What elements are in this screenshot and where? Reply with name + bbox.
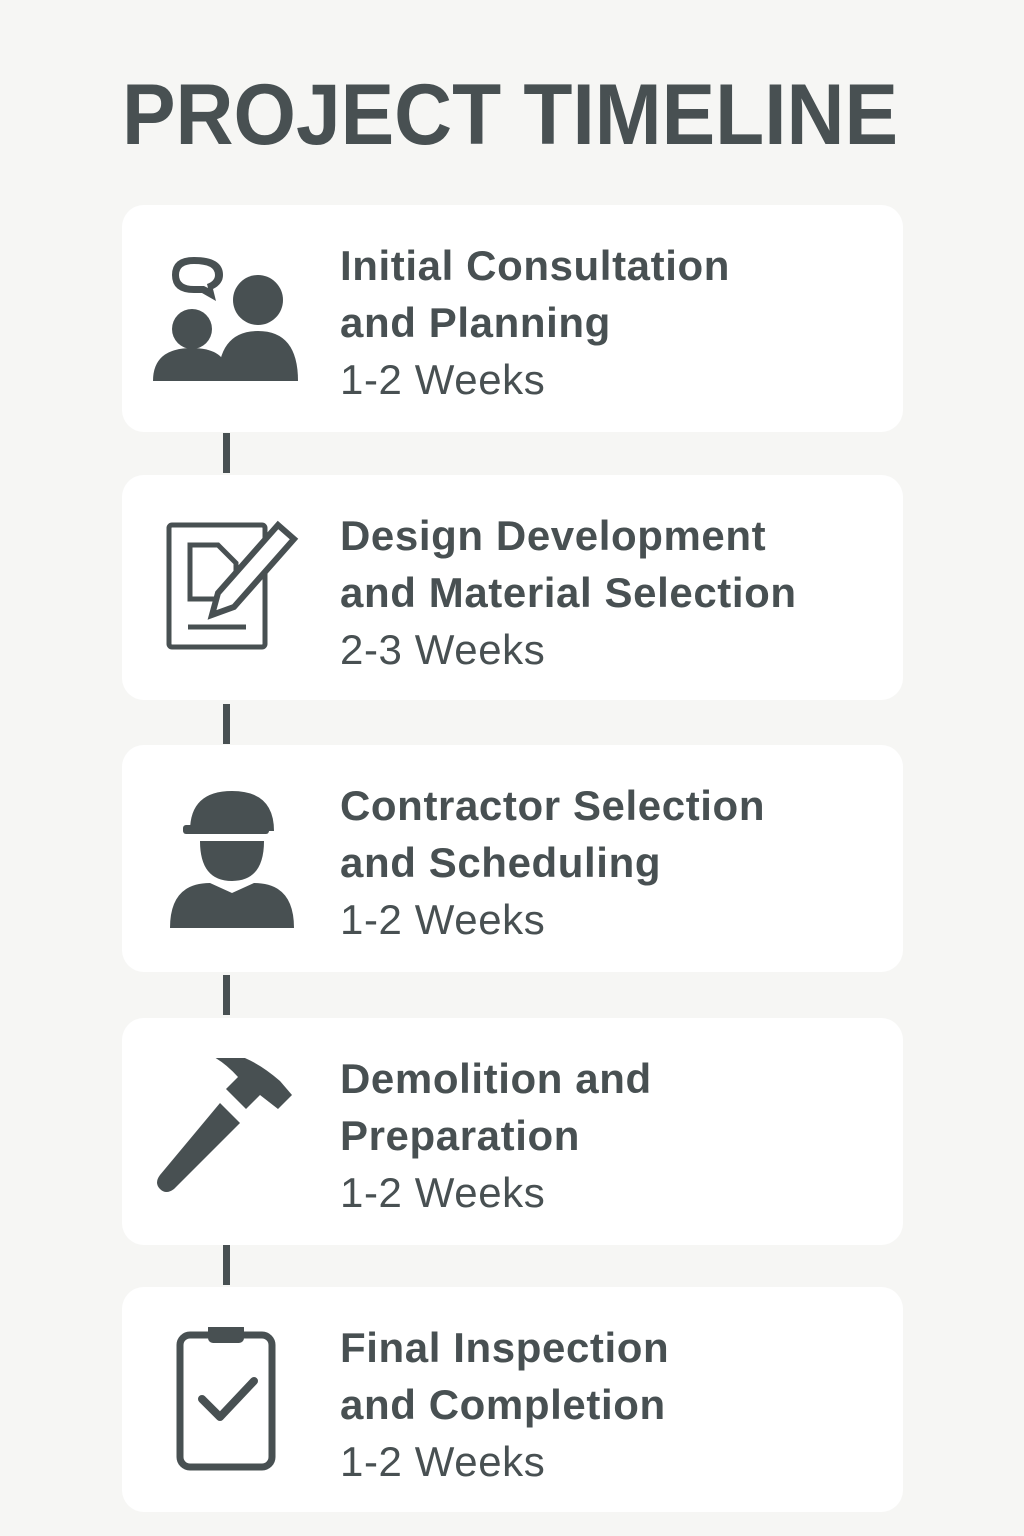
connector [223, 975, 230, 1015]
icon: clipboard check [176, 1327, 276, 1470]
card: demolition: 1-2 Weeks [340, 1169, 545, 1216]
connector [223, 704, 230, 744]
connector [223, 433, 230, 473]
card: demolition: Demolition and [340, 1055, 652, 1102]
card: contractor: Contractor Selection [340, 782, 765, 829]
card: consultation: 1-2 Weeks [340, 356, 545, 403]
icon: hammer [157, 1058, 292, 1192]
card: final: Final Inspection [340, 1324, 669, 1371]
title: PROJECT TIMELINE [122, 67, 898, 163]
card: final: 1-2 Weeks [340, 1438, 545, 1485]
icon: document with pencil [166, 520, 298, 650]
card: contractor: 1-2 Weeks [340, 896, 545, 943]
card: contractor: and Scheduling [340, 839, 661, 886]
icon: people [153, 257, 298, 381]
icon: worker [170, 791, 294, 928]
card: design: Design Development [340, 512, 766, 559]
connector [223, 1245, 230, 1285]
card: final: and Completion [340, 1381, 666, 1428]
card: demolition: Preparation [340, 1112, 580, 1159]
card: consultation [122, 205, 903, 432]
card: consultation: and Planning [340, 299, 611, 346]
card: design [122, 475, 903, 700]
card: demolition [122, 1018, 903, 1245]
card: final [122, 1287, 903, 1512]
card: design: 2-3 Weeks [340, 626, 545, 673]
card: consultation: Initial Consultation [340, 242, 730, 289]
card: contractor [122, 745, 903, 972]
card: design: and Material Selection [340, 569, 797, 616]
